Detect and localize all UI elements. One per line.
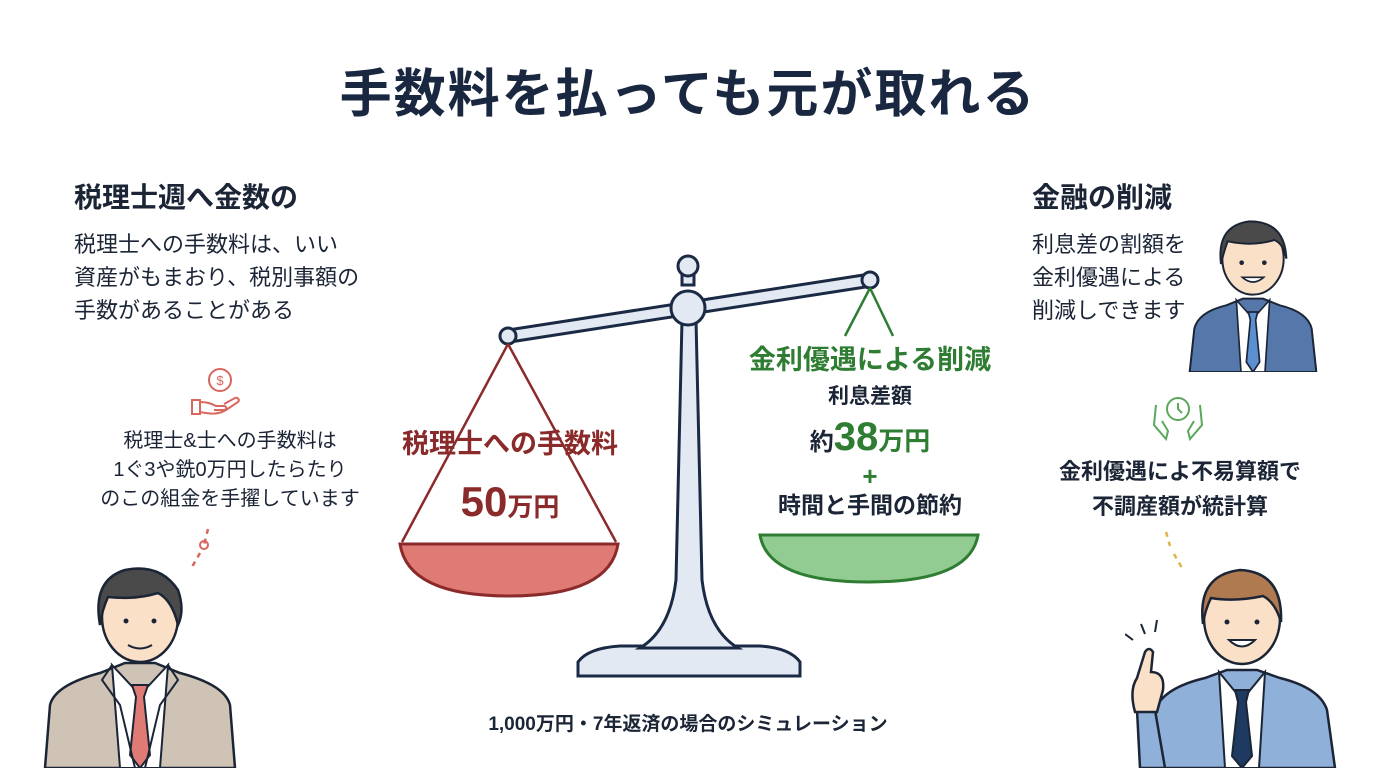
right heading: 金融の削減 xyxy=(1032,182,1172,213)
right pan labels: 利息差額 xyxy=(828,385,912,408)
person: right bottom pointing xyxy=(1125,568,1336,768)
left body text: 資産がもまおり、税別事額の xyxy=(74,265,359,290)
dashed callout mark left xyxy=(192,528,210,567)
left pan xyxy=(400,344,618,596)
icon: hand with coin: $ xyxy=(216,373,224,388)
right small text xyxy=(1059,459,1301,519)
scale beam xyxy=(500,256,878,344)
left body text: 手数があることがある xyxy=(74,298,294,323)
left body text xyxy=(74,232,359,323)
right small text: 金利優遇によ不易算額で xyxy=(1059,459,1301,484)
right small text: 不調産額が統計算 xyxy=(1092,494,1268,519)
dashed callout mark right xyxy=(1164,532,1182,568)
footnote: 1,000万円・7年返済の場合のシミュレーション xyxy=(488,714,888,735)
right body text: 利息差の割額を xyxy=(1032,232,1186,257)
right pan labels: 金利優遇による削減 xyxy=(749,345,991,375)
left small text: のこの組金を手擢しています xyxy=(100,488,360,510)
right pan labels xyxy=(749,345,991,518)
left small text: 1ぐ3や銑0万円したらたり xyxy=(113,459,347,481)
left pan label: 税理士への手数料 xyxy=(402,429,618,459)
scale base xyxy=(578,320,800,676)
person: right top xyxy=(1188,220,1318,372)
person: left consultant xyxy=(44,567,236,768)
right body text: 削減しできます xyxy=(1032,298,1185,323)
icon: hands with clock xyxy=(1153,397,1203,441)
left small text xyxy=(100,430,360,510)
left pan amount: 50万円 xyxy=(461,478,559,525)
right pan labels: 約38万円 xyxy=(810,415,930,459)
right body text xyxy=(1032,232,1186,323)
right pan xyxy=(760,288,978,582)
title: 手数料を払っても元が取れる xyxy=(340,66,1036,124)
left heading: 税理士週へ金数の xyxy=(74,182,298,213)
left small text: 税理士&士への手数料は xyxy=(123,430,337,452)
icon: hand with coin xyxy=(191,368,240,415)
right pan labels: 時間と手間の節約 xyxy=(778,492,962,518)
right body text: 金利優遇による xyxy=(1032,265,1185,290)
left body text: 税理士への手数料は、いい xyxy=(74,232,338,257)
right pan labels: + xyxy=(862,461,878,491)
